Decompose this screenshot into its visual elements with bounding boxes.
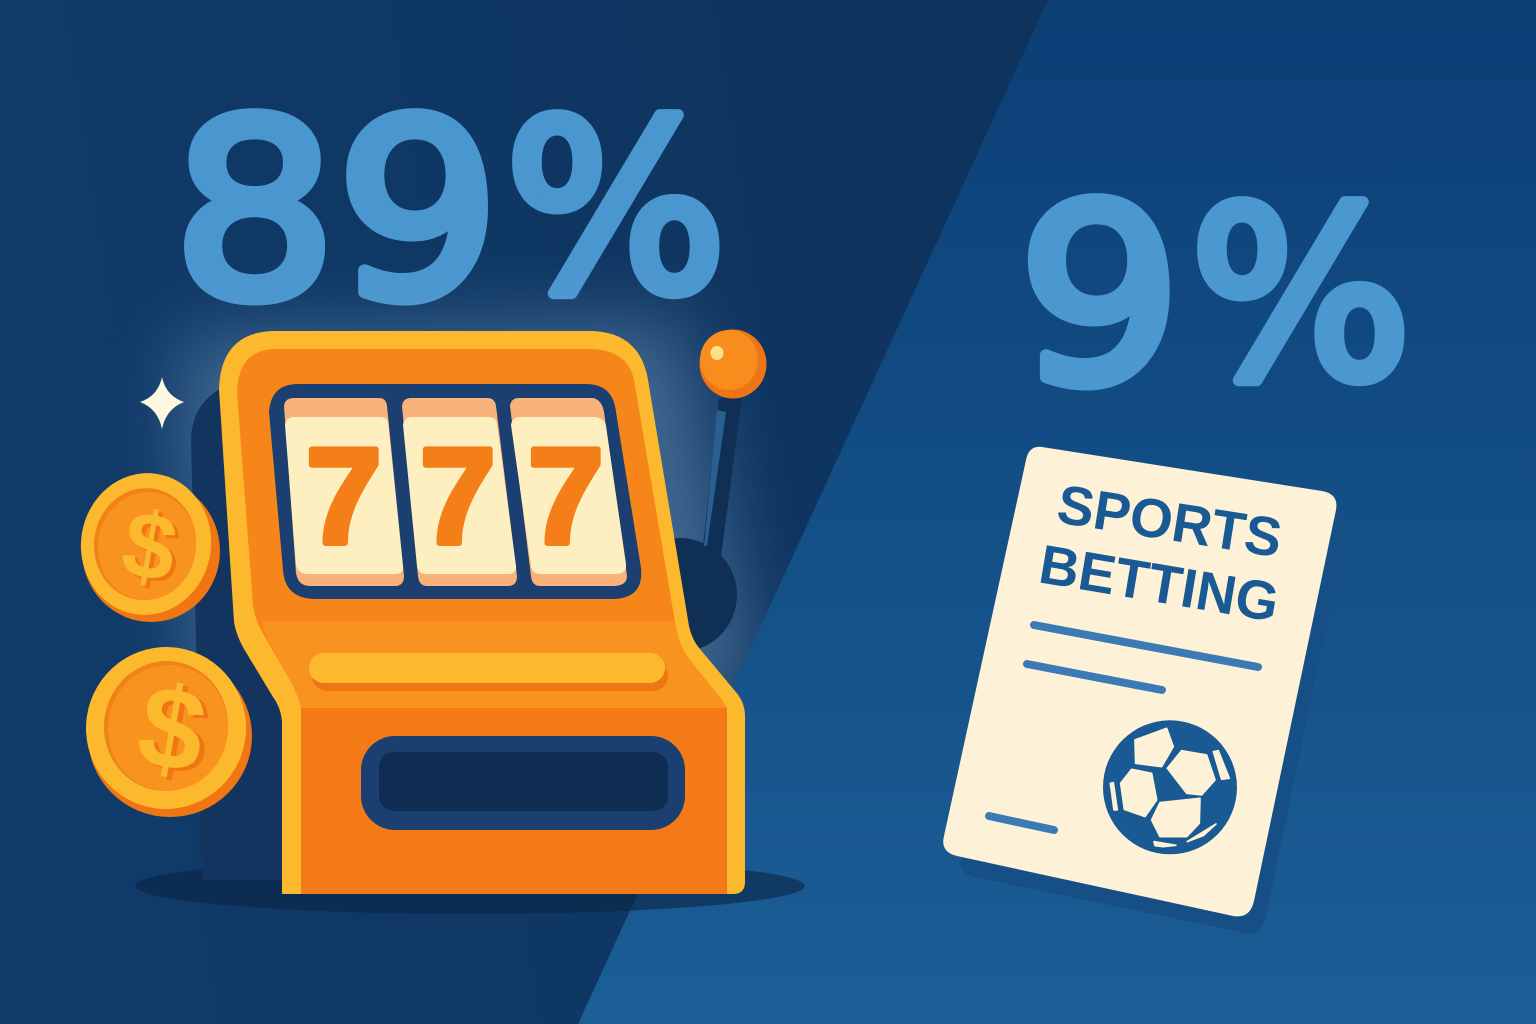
slip shadow	[961, 465, 1347, 933]
machine middle panel	[262, 621, 727, 708]
background: right panel	[578, 0, 1536, 1024]
lever pole	[703, 398, 742, 557]
statistic: 9%: %	[1190, 159, 1412, 433]
machine upper body	[237, 349, 727, 708]
statistic: 89%: %	[505, 72, 727, 346]
slip heading: BETTING	[1035, 533, 1283, 634]
payout bar	[309, 653, 668, 691]
statistic: 89%	[173, 70, 727, 355]
reel 1	[284, 398, 404, 586]
coin slot	[361, 736, 685, 830]
reel window	[269, 384, 641, 599]
reel 3: 7	[528, 420, 604, 572]
sparkle	[140, 377, 184, 429]
lever base	[623, 538, 737, 652]
slip text lines	[989, 625, 1258, 830]
slip heading: SPORTS	[1053, 473, 1286, 569]
coin: lower	[76, 637, 256, 819]
coin: upper: $	[115, 490, 185, 602]
slot machine	[219, 331, 745, 894]
machine outer frame	[219, 331, 745, 894]
glow behind slot machine	[180, 320, 760, 760]
betting slip	[943, 447, 1347, 933]
coin: lower: $	[134, 662, 220, 801]
coin: upper	[72, 465, 220, 623]
slip paper	[943, 447, 1336, 916]
lever pole highlight	[704, 410, 726, 546]
machine back shadow	[191, 380, 300, 880]
coin: lower: $	[129, 659, 215, 798]
floor shadow	[135, 858, 805, 914]
reel 2	[402, 398, 517, 586]
icon: soccer ball	[1103, 720, 1237, 854]
reel 3	[510, 398, 627, 586]
statistic: 9%: 9	[1018, 155, 1181, 440]
statistic: 89%: 89	[173, 70, 500, 355]
reel 1: 7	[306, 420, 382, 572]
statistic: 9%	[1018, 155, 1412, 440]
reel 2: 7	[420, 420, 496, 572]
slip heading	[1035, 473, 1286, 634]
lever	[623, 330, 766, 652]
lever knob	[700, 330, 766, 398]
coin: upper: $	[119, 493, 189, 605]
machine lower body	[301, 708, 727, 894]
